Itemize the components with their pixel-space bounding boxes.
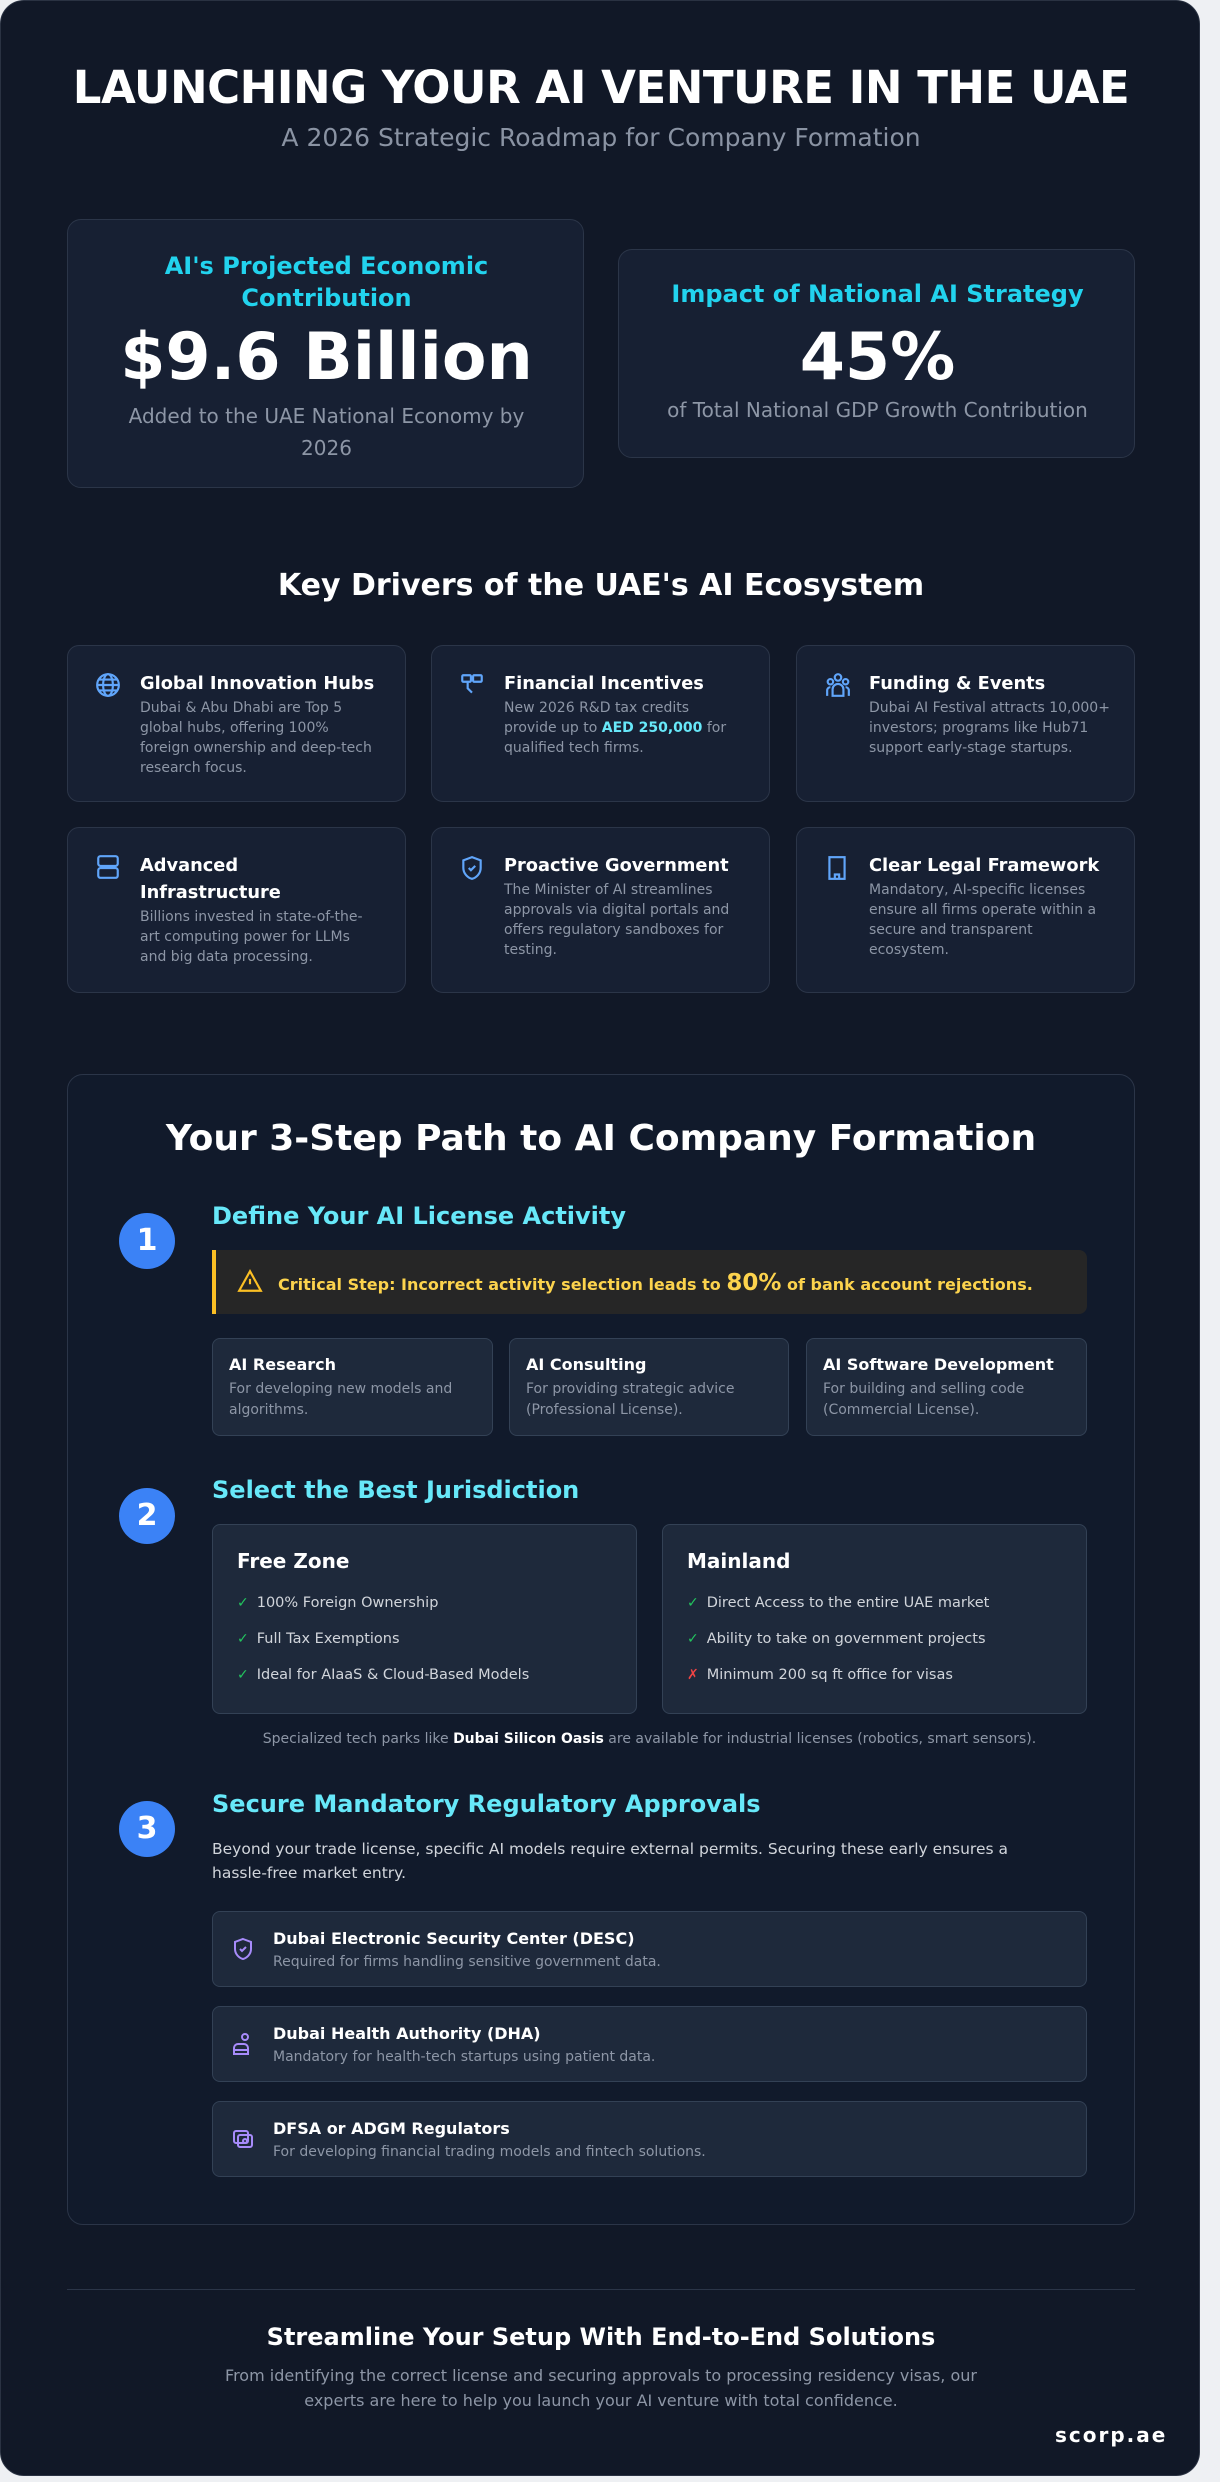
step 1 badge: 1 xyxy=(137,1223,157,1258)
heading: key drivers: Key Drivers of the UAE's AI Ecosystem xyxy=(278,568,924,603)
driver: advanced infrastructure: Advanced Infrastructure xyxy=(140,855,281,903)
driver: proactive government xyxy=(431,827,770,993)
footer heading: Streamline Your Setup With End-to-End Solutions xyxy=(267,2323,935,2351)
license option: AI consulting: For providing strategic advice (Professional License). xyxy=(526,1381,734,1418)
step 3 description: Beyond your trade license, specific AI models require external permits. Securing these early ensures a hassle-free market entry. xyxy=(212,1840,1008,1882)
step 2 title: Select the Best Jurisdiction xyxy=(212,1476,579,1504)
approval: DHA xyxy=(212,2006,1087,2082)
license option: AI consulting: AI Consulting xyxy=(526,1355,646,1374)
license option: AI research xyxy=(212,1338,493,1436)
driver: global innovation hubs xyxy=(67,645,406,802)
driver: proactive government: The Minister of AI streamlines approvals via digital portals and offers regulatory sandboxes for testing. xyxy=(504,882,729,958)
driver: advanced infrastructure xyxy=(67,827,406,993)
driver: global innovation hubs: Dubai & Abu Dhabi are Top 5 global hubs, offering 100% foreign ownership and deep-tech research focus. xyxy=(140,700,372,776)
driver: financial incentives: New 2026 R&D tax credits provide up to AED 250,000 for qualified tech firms. xyxy=(504,700,726,756)
footer text: From identifying the correct license and securing approvals to processing residency visas, our experts are here to help you launch your AI venture with total confidence. xyxy=(225,2366,977,2410)
driver: funding & events: Funding & Events xyxy=(869,673,1045,694)
driver: clear legal framework: Clear Legal Framework xyxy=(869,855,1099,876)
step 1 badge xyxy=(119,1213,175,1269)
approval: DFSA/ADGM: For developing financial trading models and fintech solutions. xyxy=(273,2144,706,2160)
license option: AI consulting xyxy=(509,1338,789,1436)
approval: DESC xyxy=(212,1911,1087,1987)
step 2 badge: 2 xyxy=(137,1498,157,1533)
driver: funding & events xyxy=(796,645,1135,802)
license option: AI research: For developing new models and algorithms. xyxy=(229,1381,452,1418)
jurisdiction: mainland: ✓ Ability to take on government projects xyxy=(687,1631,986,1647)
step 1 title: Define Your AI License Activity xyxy=(212,1202,626,1230)
driver: financial incentives: Financial Incentives xyxy=(504,673,704,694)
jurisdiction: mainland: Mainland xyxy=(687,1549,790,1573)
approval: DESC: Required for firms handling sensitive government data. xyxy=(273,1954,661,1970)
callout: critical step warning xyxy=(212,1250,1087,1314)
stat card: economic contribution: $9.6 Billion xyxy=(120,320,533,395)
license option: AI software development: AI Software Development xyxy=(823,1355,1054,1374)
stat card: national AI strategy: 45% xyxy=(800,320,955,395)
license option: AI software development xyxy=(806,1338,1087,1436)
approval: DESC: Dubai Electronic Security Center (DESC) xyxy=(273,1929,635,1948)
driver: clear legal framework: Mandatory, AI-specific licenses ensure all firms operate within a secure and transparent ecosystem. xyxy=(869,882,1096,958)
step 2 badge xyxy=(119,1488,175,1544)
title: LAUNCHING YOUR AI VENTURE IN THE UAE xyxy=(73,61,1129,114)
subtitle: A 2026 Strategic Roadmap for Company Formation xyxy=(281,123,921,152)
driver: global innovation hubs: Global Innovation Hubs xyxy=(140,673,374,694)
approval: DFSA/ADGM xyxy=(212,2101,1087,2177)
stat card: national AI strategy xyxy=(618,249,1135,458)
jurisdiction: free zone xyxy=(212,1524,637,1714)
note: tech parks: Specialized tech parks like Dubai Silicon Oasis are available for industrial licenses (robotics, smart sensors). xyxy=(263,1731,1036,1747)
jurisdiction: mainland: ✗ Minimum 200 sq ft office for visas xyxy=(687,1667,953,1683)
license option: AI software development: For building and selling code (Commercial License). xyxy=(823,1381,1024,1418)
heading: 3-step path: Your 3-Step Path to AI Company Formation xyxy=(166,1118,1036,1159)
driver: clear legal framework xyxy=(796,827,1135,993)
step 3 badge xyxy=(119,1801,175,1857)
step 3 title: Secure Mandatory Regulatory Approvals xyxy=(212,1790,761,1818)
stat card: national AI strategy: Impact of National AI Strategy xyxy=(671,280,1084,308)
callout: critical step warning: Critical Step: Incorrect activity selection leads to 80% of bank account rejections. xyxy=(278,1270,1033,1296)
brand: scorp.ae: scorp.ae xyxy=(1055,2423,1167,2447)
stat card: economic contribution: Contribution xyxy=(241,284,412,312)
approval: DFSA/ADGM: DFSA or ADGM Regulators xyxy=(273,2119,510,2138)
jurisdiction: mainland xyxy=(662,1524,1087,1714)
license option: AI research: AI Research xyxy=(229,1355,336,1374)
jurisdiction: mainland: ✓ Direct Access to the entire UAE market xyxy=(687,1595,989,1611)
stat card: economic contribution xyxy=(67,219,584,488)
jurisdiction: free zone: ✓ Full Tax Exemptions xyxy=(237,1631,400,1647)
stat card: national AI strategy: of Total National GDP Growth Contribution xyxy=(667,398,1088,422)
approval: DHA: Mandatory for health-tech startups using patient data. xyxy=(273,2049,655,2065)
approval: DHA: Dubai Health Authority (DHA) xyxy=(273,2024,541,2043)
driver: financial incentives xyxy=(431,645,770,802)
panel: 3-step path xyxy=(67,1074,1135,2225)
stat card: economic contribution: Added to the UAE National Economy by 2026 xyxy=(129,404,524,460)
driver: proactive government: Proactive Government xyxy=(504,855,729,876)
jurisdiction: free zone: ✓ 100% Foreign Ownership xyxy=(237,1595,438,1611)
stat card: economic contribution: AI's Projected Economic xyxy=(165,252,488,280)
driver: funding & events: Dubai AI Festival attracts 10,000+ investors; programs like Hub71 support early-stage startups. xyxy=(869,700,1110,756)
step 3 badge: 3 xyxy=(137,1811,157,1846)
jurisdiction: free zone: Free Zone xyxy=(237,1549,349,1573)
driver: advanced infrastructure: Billions invested in state-of-the-art computing power for LLMs and big data processing. xyxy=(140,909,363,965)
jurisdiction: free zone: ✓ Ideal for AIaaS & Cloud-Based Models xyxy=(237,1667,529,1683)
